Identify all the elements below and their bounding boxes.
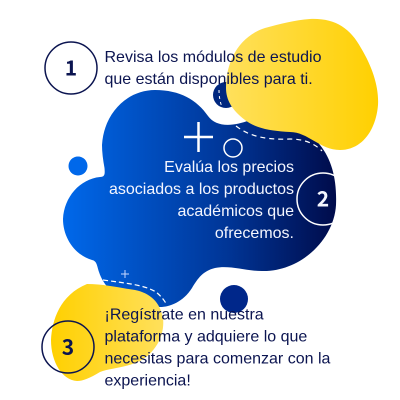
step 3 bbox=[42, 306, 330, 390]
step 2 text: Evalúa los precios bbox=[164, 159, 294, 176]
dashed line top right bbox=[236, 126, 322, 151]
blue dot left bbox=[68, 156, 88, 176]
step 1 bbox=[45, 42, 322, 94]
small plus icon bbox=[121, 270, 129, 278]
step 2 badge: 2 bbox=[317, 184, 329, 214]
step 3 text: necesitas para comenzar con la bbox=[104, 350, 330, 368]
step 2 text: asociados a los productos bbox=[109, 181, 294, 198]
yellow blob top right bbox=[226, 19, 378, 150]
step 1 text: Revisa los módulos de estudio bbox=[104, 49, 322, 66]
step 3 text: experiencia! bbox=[104, 372, 191, 390]
step 2 text: académicos que bbox=[177, 203, 294, 220]
step 2 bbox=[109, 159, 349, 242]
yellow blob bottom left bbox=[51, 284, 163, 381]
step 1 text: que están disponibles para ti. bbox=[104, 71, 313, 88]
step 1 badge bbox=[45, 42, 97, 94]
dashed line bottom bbox=[103, 280, 167, 305]
step 1 badge: 1 bbox=[65, 52, 77, 82]
step 3 text: ¡Regístrate en nuestra bbox=[104, 306, 264, 324]
small circle outline bbox=[224, 139, 242, 157]
step 2 text: ofrecemos. bbox=[215, 225, 294, 242]
step 2 badge bbox=[297, 173, 349, 225]
step 3 badge: 3 bbox=[62, 332, 74, 362]
step 3 text: plataforma y adquiere lo que bbox=[104, 328, 307, 346]
step 3 badge bbox=[42, 321, 94, 373]
navy dot bottom bbox=[220, 285, 248, 313]
white plus icon bbox=[184, 122, 213, 152]
small navy circle behind yellow blob bbox=[213, 82, 239, 108]
blue central blob bbox=[63, 90, 336, 307]
